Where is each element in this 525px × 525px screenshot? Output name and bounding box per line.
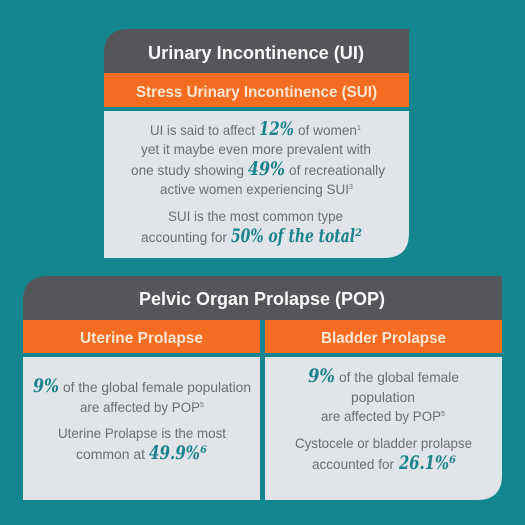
panel: urinary incontinence [104,29,409,258]
text block: prevalence: of recreationally [289,162,385,178]
text block: global population: 9% [33,376,59,397]
text block: most common type: 2 [354,228,362,239]
text block: cystocele: accounted for [312,456,394,472]
text block: prevalence: active women experiencing SUI [160,181,349,197]
text block: cystocele: 26.1% [398,453,449,474]
text block: global population: of the global female [339,369,459,385]
text block: global population: 5 [441,411,445,418]
text block: most common: Uterine Prolapse is the most [58,425,226,441]
text block: prevalence: 3 [349,184,353,191]
text block: prevalence: 1 [357,125,361,132]
text block: prevalence: 12% [259,119,294,140]
subheading bar: uterine [23,320,260,353]
text block: global population [308,366,459,424]
text block: cystocele: 6 [449,455,456,466]
heading: Urinary Incontinence (UI): Urinary Incontinence (UI) [148,43,364,63]
text block: global population: of the global female population [63,379,251,395]
text block: most common type: 50% of the total [231,226,355,247]
text block: most common: 49.9% [149,443,200,464]
text block: prevalence: 49% [248,159,285,180]
subheading: Uterine Prolapse: Uterine Prolapse [80,330,203,347]
text block: global population [33,376,251,415]
text block: global population: 5 [200,402,204,409]
text block: global population: are affected by POP [321,408,441,424]
column: bladder prolapse [265,320,502,500]
text block: most common type [141,208,362,247]
text block: prevalence: UI is said to affect [150,122,255,138]
text block: cystocele: Cystocele or bladder prolapse [295,435,472,451]
text block: most common type: SUI is the most common type [168,208,343,224]
text block: most common [58,425,226,464]
heading bar: Pelvic Organ Prolapse [23,276,502,320]
text block: most common: common at [76,446,145,462]
body panel: bladder [265,357,502,500]
text block: prevalence [131,119,385,197]
subheading: Bladder Prolapse: Bladder Prolapse [321,330,446,347]
subheading bar: SUI [104,73,409,107]
body panel: uterine [23,357,260,500]
text block: prevalence: yet it maybe even more prevalent with [141,141,371,157]
subheading bar: bladder [265,320,502,353]
text block: most common type: accounting for [141,229,227,245]
panel: pelvic organ prolapse [23,276,502,500]
text block: global population: population [351,389,415,405]
body panel: SUI [104,111,409,258]
text block: prevalence: of women [298,122,357,138]
text block: cystocele [295,435,472,474]
column: uterine prolapse [23,320,260,500]
subheading: Stress Urinary Incontinence (SUI): Stress Urinary Incontinence (SUI) [136,84,377,101]
heading bar: Urinary Incontinence [104,29,409,73]
text block: global population: 9% [308,366,335,387]
heading: Pelvic Organ Prolapse (POP): Pelvic Organ Prolapse (POP) [139,289,385,309]
text block: most common: 6 [200,445,207,456]
text block: prevalence: one study showing [131,162,244,178]
text block: global population: are affected by POP [80,399,200,415]
